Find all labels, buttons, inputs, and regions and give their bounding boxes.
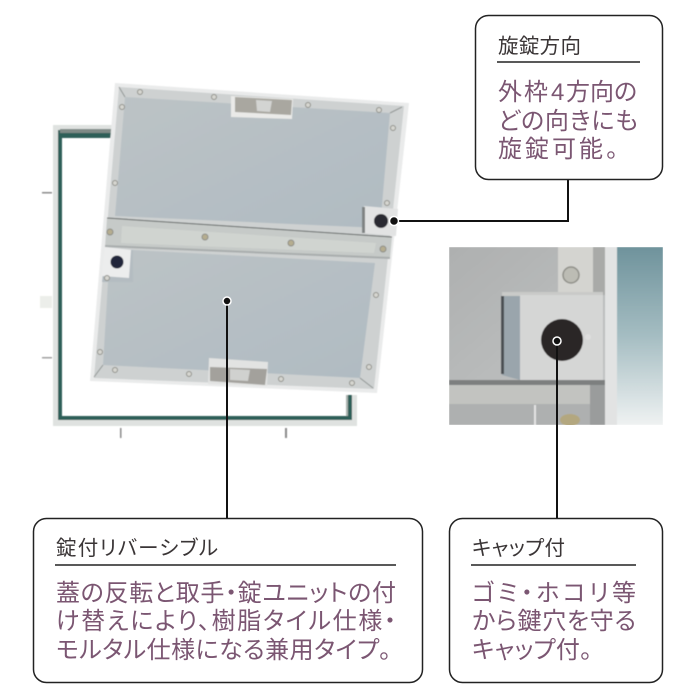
lid (90, 83, 409, 393)
callout: 旋錠方向 (476, 16, 662, 180)
heading: 錠付リバーシブル (56, 536, 218, 560)
body text (498, 79, 638, 163)
hinge bar (105, 218, 392, 258)
body text: モルタル仕様になる兼用タイプ。 (56, 637, 391, 664)
lock caps (102, 206, 398, 278)
body text: け替えにより、樹脂タイル仕様・ (56, 608, 396, 635)
body text: ゴミ・ホコリ等 (472, 580, 636, 607)
mitred corners of lid frame (94, 87, 402, 388)
bottom handle (208, 358, 268, 386)
body text: どの向きにも (498, 108, 638, 135)
bar (450, 386, 490, 403)
cap front (502, 292, 603, 296)
close-up photo of cap (449, 247, 663, 426)
body text (472, 580, 636, 664)
connector: キャップ付 (553, 337, 561, 518)
product photo: floor hatch with open reversible lid (40, 83, 409, 438)
screws (98, 90, 396, 386)
body text: 蓋の反転と取手・錠ユニットの付 (56, 580, 396, 607)
callout: 錠付リバーシブル (34, 518, 422, 682)
heading: 旋錠方向 (498, 35, 581, 58)
body text: から鍵穴を守る (472, 608, 636, 635)
top handle (231, 96, 293, 119)
body text: キャップ付。 (472, 637, 592, 664)
body text: 旋錠可能。 (498, 136, 618, 163)
body text: 外枠4方向の (498, 79, 637, 106)
callout: キャップ付 (450, 518, 662, 682)
outer frame (40, 125, 357, 438)
sky background (617, 247, 663, 425)
body text (56, 580, 396, 664)
connector: 錠付リバーシブル (223, 297, 231, 518)
keyhole (541, 319, 583, 361)
connector: 旋錠方向 (390, 179, 568, 226)
cap side (502, 295, 520, 380)
heading: キャップ付 (472, 537, 565, 560)
